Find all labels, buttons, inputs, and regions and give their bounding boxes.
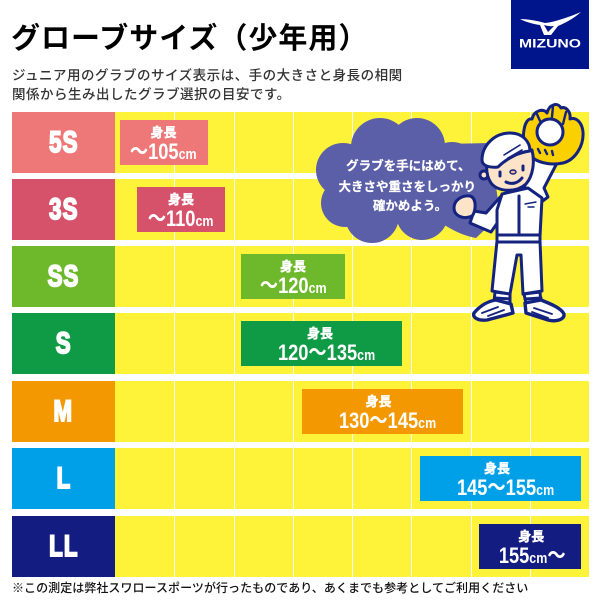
speech bubble xyxy=(316,118,500,243)
panel: row L: 身長 xyxy=(484,461,510,476)
fist xyxy=(454,196,475,218)
panel: row 5S: 5S xyxy=(49,126,78,158)
panel: row 5S: 身長 xyxy=(150,124,176,140)
speech bubble: 確かめよう。 xyxy=(373,198,447,213)
jacket logo mark xyxy=(525,202,536,207)
panel: row L xyxy=(12,448,589,509)
title: グローブサイズ（少年用） xyxy=(11,23,368,55)
panel: row 3S: 3S xyxy=(49,192,78,226)
panel: row LL: 身長 xyxy=(518,528,544,544)
panel: row M xyxy=(12,380,589,442)
panel: row S: S xyxy=(56,327,71,360)
ear xyxy=(480,171,488,179)
panel: row M: 身長 xyxy=(365,394,392,408)
panel: row M: 130～145cm xyxy=(339,408,436,432)
panel: row S: 身長 xyxy=(307,326,333,341)
panel: row L: L xyxy=(56,462,71,495)
panel: row M: M xyxy=(54,394,73,428)
socks xyxy=(494,292,541,303)
panel: row 3S: ～110cm xyxy=(148,206,214,231)
intro text xyxy=(12,68,403,102)
raised arm xyxy=(522,157,557,212)
panel: row S: 120～135cm xyxy=(278,340,375,365)
shoes xyxy=(474,300,513,320)
panel: row SS: 身長 xyxy=(280,259,306,274)
panel: row SS: ～120cm xyxy=(260,273,326,298)
intro text: ジュニア用のグラブのサイズ表示は、手の大きさと身長の相関 xyxy=(12,68,403,83)
footnote: ※この測定は弊社スワロースポーツが行ったものであり、あくまでも参考としてご利用ください xyxy=(12,581,528,595)
left arm xyxy=(470,195,502,232)
panel: row LL xyxy=(12,516,589,576)
speech bubble: 大きさや重さをしっかり xyxy=(338,179,476,194)
jacket xyxy=(497,188,542,236)
eyes and mouth xyxy=(500,166,523,183)
panel: row LL: 155cm～ xyxy=(498,542,565,568)
panel: row 5S xyxy=(12,112,589,172)
pants xyxy=(492,241,542,294)
glove xyxy=(523,105,583,164)
player xyxy=(454,105,583,321)
panel: row 5S: ～105cm xyxy=(130,138,197,164)
panel: row SS: SS xyxy=(48,260,79,292)
cap xyxy=(482,133,530,167)
panel: row L: 145～155cm xyxy=(457,475,554,500)
face xyxy=(487,150,533,190)
logo: Mizuno xyxy=(511,0,589,69)
panel: row LL: LL xyxy=(49,530,78,562)
panel: row 3S xyxy=(12,178,589,240)
belt xyxy=(497,235,540,242)
panel: row 3S: 身長 xyxy=(168,192,194,207)
panel: row S xyxy=(12,313,589,374)
speech bubble: グラブを手にはめて、 xyxy=(346,158,470,173)
panel: row SS xyxy=(12,246,589,306)
intro text: 関係から生み出したグラブ選択の目安です。 xyxy=(12,87,291,102)
logo: Mizuno: MIZUNO xyxy=(519,38,581,50)
